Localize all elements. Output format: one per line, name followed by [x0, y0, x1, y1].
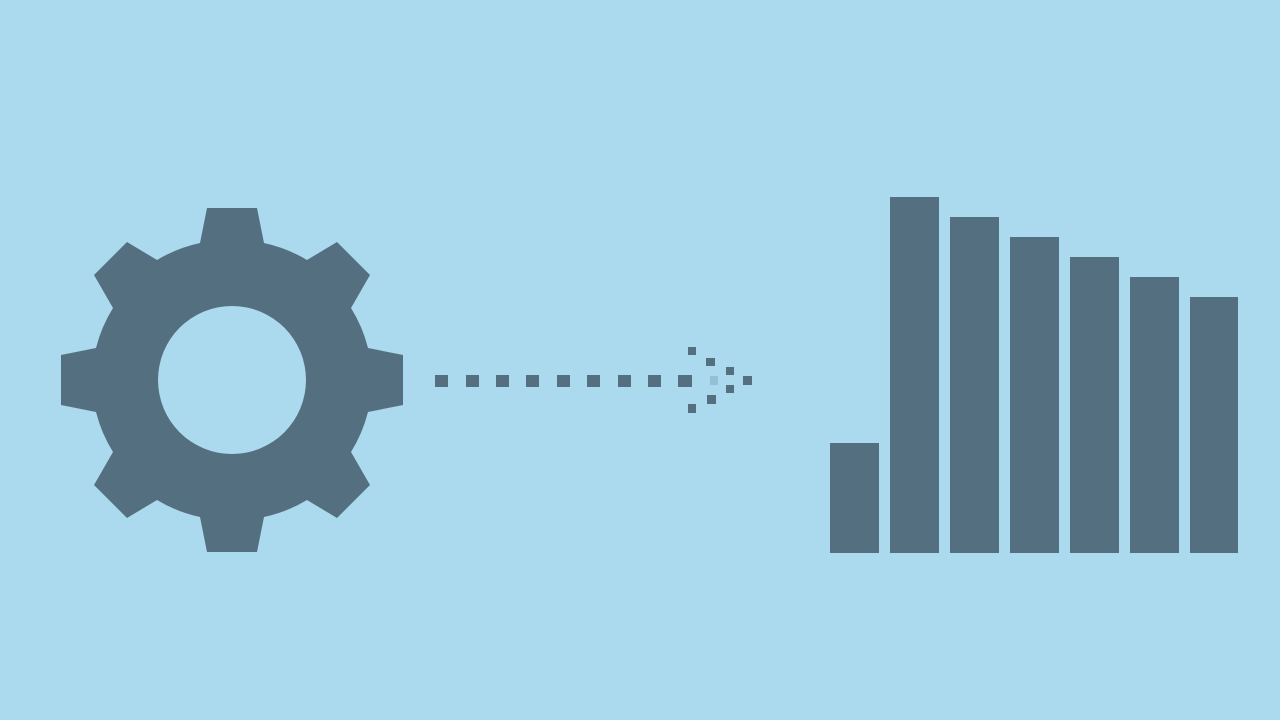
arrow: dotted arrow pointing right — [435, 347, 752, 413]
bar chart — [830, 197, 1238, 553]
icon: gear — [61, 208, 403, 552]
